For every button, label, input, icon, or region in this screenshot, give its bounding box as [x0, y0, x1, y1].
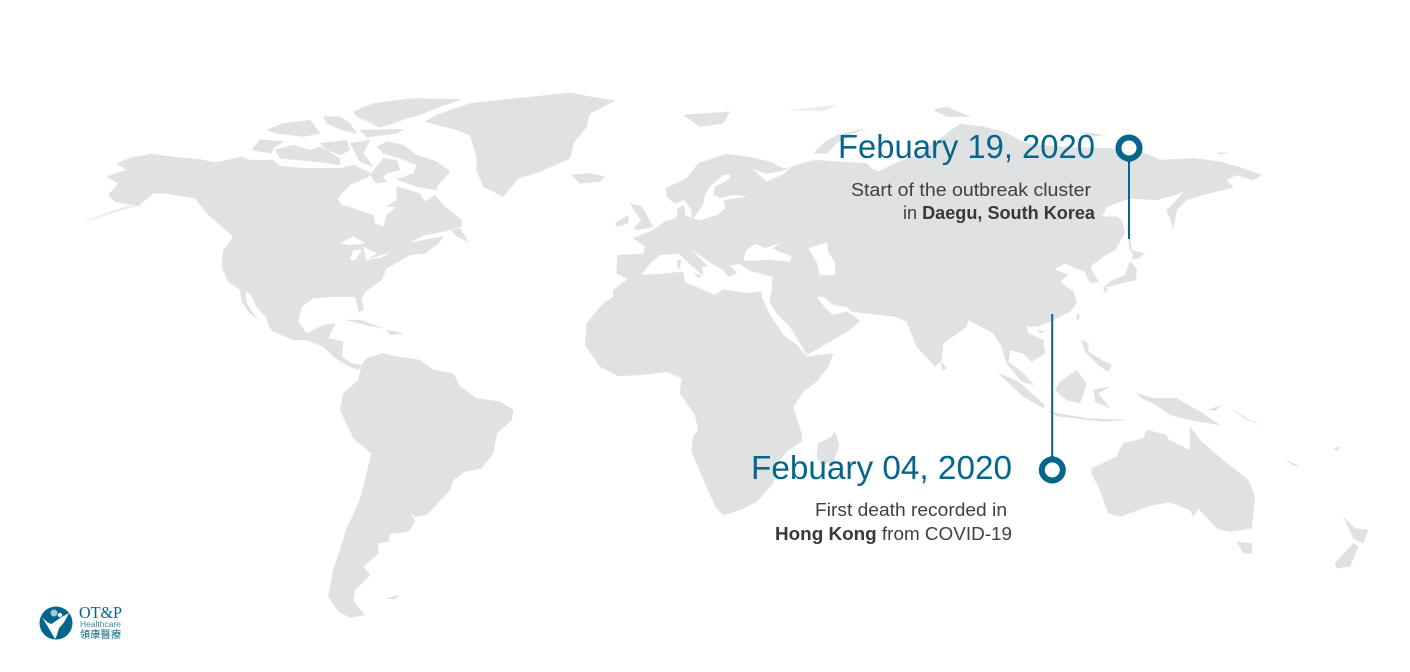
marker pin: South Korea	[1118, 138, 1140, 163]
Sicily	[693, 273, 702, 278]
Black Sea	[743, 243, 792, 262]
New Caledonia	[1285, 460, 1300, 466]
Axel Heiberg area islands	[323, 117, 357, 133]
Cuba	[347, 320, 383, 328]
Franz Josef Land	[790, 105, 837, 111]
Ireland	[615, 215, 628, 227]
description: Daegu outbreak: in Daegu, South Korea	[903, 202, 1096, 223]
description: Hong Kong first death	[775, 499, 1012, 544]
New Siberian Islands	[1080, 132, 1103, 137]
description: Daegu outbreak	[851, 179, 1096, 223]
Hokkaido	[1130, 250, 1145, 259]
Java and Lesser Sunda Islands	[1048, 412, 1127, 422]
logo: OT&P Healthcare	[40, 603, 122, 641]
logo tagline: Healthcare	[80, 620, 122, 629]
Ellesmere Island	[353, 98, 462, 127]
Devon Island	[360, 129, 403, 137]
description: Hong Kong first death: Hong Kong from COVID-19	[775, 523, 1012, 544]
marker line: Hong Kong	[1051, 314, 1053, 460]
White Sea	[753, 167, 792, 182]
Southampton Island	[370, 173, 387, 183]
Sri Lanka	[941, 362, 947, 371]
Solomon Islands	[1232, 409, 1260, 425]
world map	[85, 93, 1368, 617]
Sakhalin	[1127, 227, 1132, 252]
Melville Island	[267, 120, 320, 137]
Tasmania	[1237, 542, 1252, 553]
South America	[328, 353, 513, 617]
Great Lakes	[340, 237, 390, 260]
Melville Peninsula	[370, 158, 400, 183]
Fiji	[1333, 446, 1340, 451]
Svalbard	[683, 112, 730, 127]
Australia	[1092, 427, 1255, 532]
Southeast Asia and Oceania	[998, 340, 1368, 568]
logo Chinese name: 領康醫療	[80, 628, 121, 641]
Prince of Wales Island	[320, 140, 350, 155]
Wrangel Island	[1217, 153, 1228, 154]
Taiwan	[1076, 313, 1080, 321]
Severnaya Zemlya	[933, 107, 970, 117]
Novaya Zemlya	[813, 128, 865, 153]
New Zealand North Island	[1343, 517, 1368, 543]
Iceland	[572, 173, 605, 183]
North America	[85, 93, 615, 370]
Sardinia	[677, 260, 681, 268]
Baltic Sea	[693, 175, 747, 220]
Honshu	[1103, 262, 1137, 288]
Borneo	[1055, 370, 1087, 403]
Falkland Islands	[387, 595, 399, 599]
Eurasia	[572, 105, 1262, 385]
description: Hong Kong first death: First death recorded in	[815, 499, 1007, 520]
Hispaniola	[387, 330, 403, 335]
logo wordmark: OT&P	[79, 603, 122, 622]
inland seas	[693, 167, 835, 275]
marker line: South Korea	[1128, 155, 1130, 239]
logo emblem	[40, 606, 72, 640]
Sumatra	[998, 373, 1045, 408]
date heading: February 19: Febuary 19, 2020	[838, 128, 1095, 165]
New Zealand South Island	[1335, 543, 1358, 568]
Boothia area	[350, 140, 373, 167]
date heading: February 04: Febuary 04, 2020	[751, 449, 1012, 486]
Kyushu	[1103, 288, 1108, 293]
Newfoundland	[452, 228, 468, 242]
marker pin: Hong Kong	[1042, 455, 1063, 480]
Hainan	[1038, 330, 1045, 333]
Philippines	[1082, 340, 1112, 372]
Banks Island	[252, 139, 283, 153]
Great Britain	[630, 203, 653, 230]
Africa	[585, 272, 839, 515]
Baffin Island	[377, 142, 450, 190]
New Guinea	[1137, 393, 1220, 425]
Aleutian chain	[85, 205, 138, 222]
Sulawesi	[1093, 387, 1110, 408]
Caspian Sea	[808, 243, 835, 275]
description: Daegu outbreak: Start of the outbreak cluster	[851, 179, 1091, 200]
Greenland	[425, 93, 615, 197]
New Britain	[1208, 405, 1222, 411]
Victoria Island	[275, 145, 340, 165]
Madagascar	[817, 432, 839, 465]
